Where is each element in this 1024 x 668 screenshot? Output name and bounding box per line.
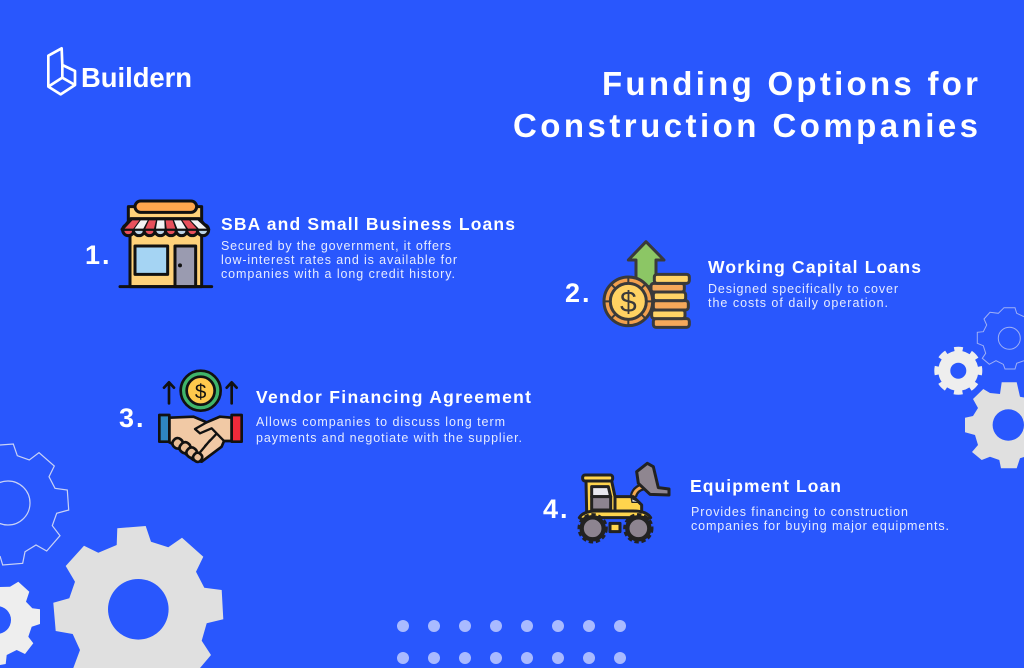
title: Funding Options for <box>602 65 978 102</box>
item 4: Equipment Loan <box>543 463 949 542</box>
icon: storefront <box>120 201 212 287</box>
gear: small right <box>934 346 983 395</box>
title: Construction Companies <box>513 107 978 144</box>
gear: small bottom left <box>0 582 40 665</box>
number 4: 4. <box>543 494 570 524</box>
gear: outline right <box>977 308 1024 369</box>
item 3: Vendor Financing Agreement <box>119 371 531 463</box>
description 3: Allows companies to discuss long term <box>256 415 505 429</box>
icon: handshake with coin <box>159 371 242 463</box>
description 2: the costs of daily operation. <box>708 296 888 310</box>
heading 1: SBA and Small Business Loans <box>221 214 515 234</box>
description 3: payments and negotiate with the supplier. <box>256 431 522 445</box>
item 2: Working Capital Loans <box>565 242 921 327</box>
description 1: low-interest rates and is available for <box>221 253 457 267</box>
title <box>513 65 978 144</box>
logo mark <box>48 48 75 94</box>
logo wordmark: Buildern <box>81 62 192 93</box>
icon: coins with arrow: $ <box>620 286 637 319</box>
description 4 <box>691 505 949 533</box>
description 4: companies for buying major equipments. <box>691 519 949 533</box>
description 3 <box>256 415 522 445</box>
item 1: SBA and Small Business Loans <box>85 201 515 287</box>
description 1: Secured by the government, it offers <box>221 239 451 253</box>
gear: outline bottom left <box>0 444 69 565</box>
gear: large right <box>965 382 1024 468</box>
logo: Buildern <box>48 48 192 94</box>
icon: coins with arrow <box>604 242 689 327</box>
description 2 <box>708 282 898 310</box>
heading 3: Vendor Financing Agreement <box>256 387 531 407</box>
heading 4: Equipment Loan <box>690 476 841 496</box>
icon: handshake with coin: $ <box>195 380 207 403</box>
number 1: 1. <box>85 240 112 270</box>
icon: wheel loader <box>579 463 669 542</box>
description 1 <box>221 239 457 281</box>
gear: large bottom left <box>53 526 223 668</box>
description 2: Designed specifically to cover <box>708 282 898 296</box>
number 2: 2. <box>565 278 592 308</box>
dot pattern <box>397 620 626 664</box>
description 1: companies with a long credit history. <box>221 267 455 281</box>
heading 2: Working Capital Loans <box>708 257 921 277</box>
number 3: 3. <box>119 403 146 433</box>
description 4: Provides financing to construction <box>691 505 908 519</box>
